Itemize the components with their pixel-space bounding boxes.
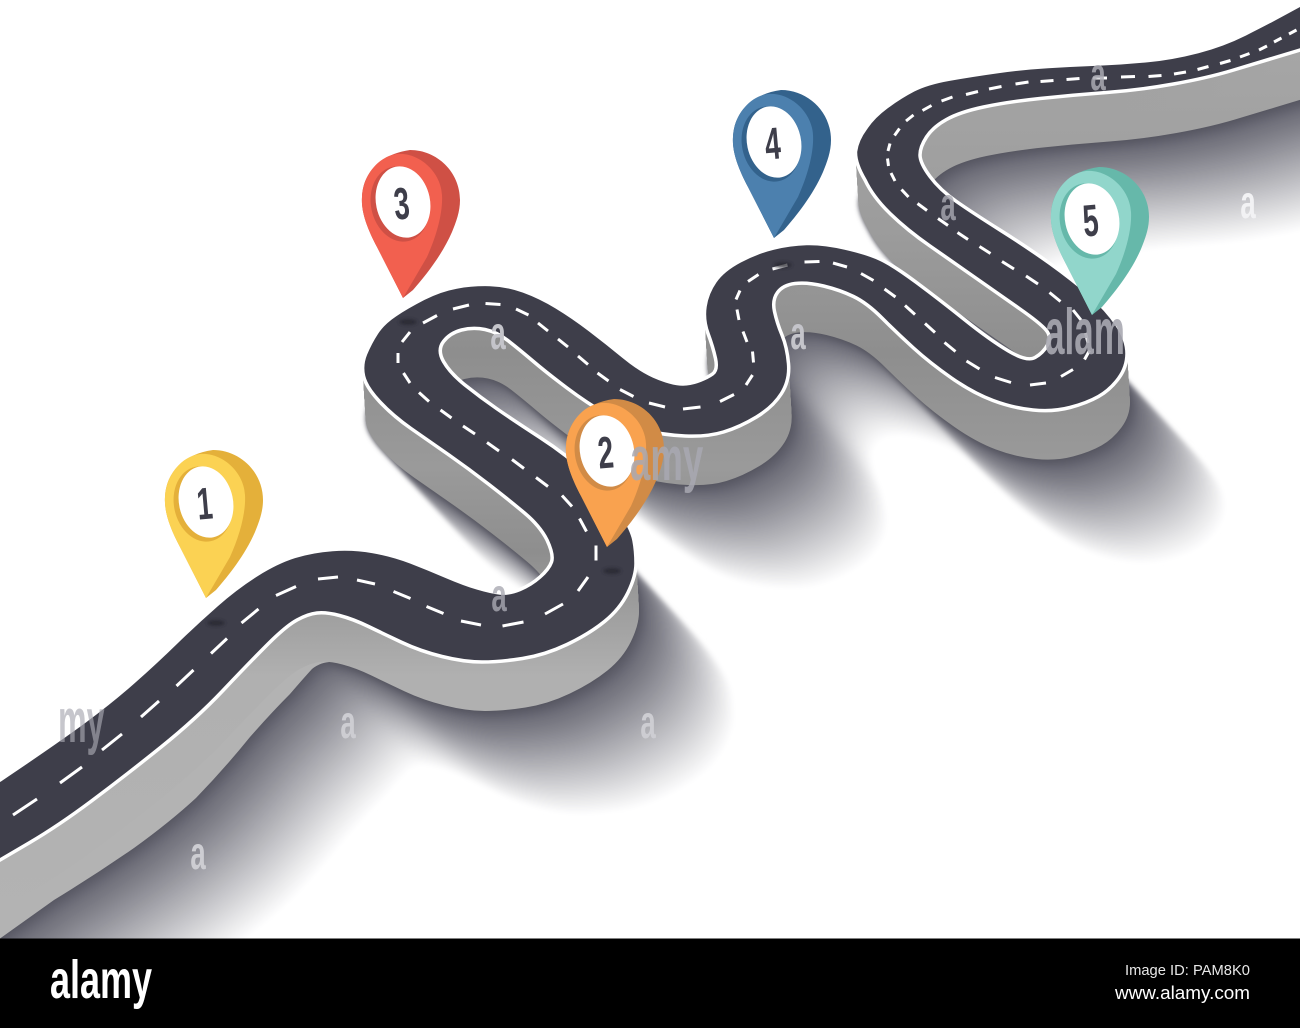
bottom credit bar: www.alamy.com: [1114, 983, 1250, 1003]
watermark text: a: [1090, 50, 1106, 101]
bottom credit bar: [0, 938, 1300, 1028]
bottom credit bar: Image ID: PAM8K0: [1125, 962, 1250, 979]
road centre dashes: [13, 30, 1296, 815]
watermark text: a: [640, 698, 656, 749]
pin 1: yellow: [165, 450, 263, 598]
pin 4: blue: 4: [763, 118, 783, 169]
pin tip contact shadows: [207, 262, 792, 626]
watermark text: amy: [630, 424, 704, 493]
watermark text: a: [491, 571, 507, 622]
bottom credit bar: alamy: [50, 949, 152, 1010]
pin 2: orange: 2: [596, 427, 616, 478]
watermark text: a: [490, 309, 506, 360]
watermark text: a: [340, 698, 356, 749]
watermark text: my: [58, 687, 105, 756]
watermark text: a: [190, 829, 206, 880]
pin 3: red: 3: [392, 178, 412, 229]
watermark text: [58, 50, 1256, 880]
pin 4: blue: [733, 90, 831, 238]
pin 1: yellow: 1: [195, 478, 215, 529]
watermark text: a: [1240, 178, 1256, 229]
watermark text: a: [790, 309, 806, 360]
pin 5: teal: [1051, 167, 1149, 315]
pin 2: orange: [566, 399, 664, 547]
pin 3: red: [362, 150, 460, 298]
pin 5: teal: 5: [1081, 195, 1101, 246]
watermark text: a: [940, 180, 956, 231]
watermark text: alam: [1045, 297, 1125, 369]
road left wall extension: [0, 612, 335, 942]
